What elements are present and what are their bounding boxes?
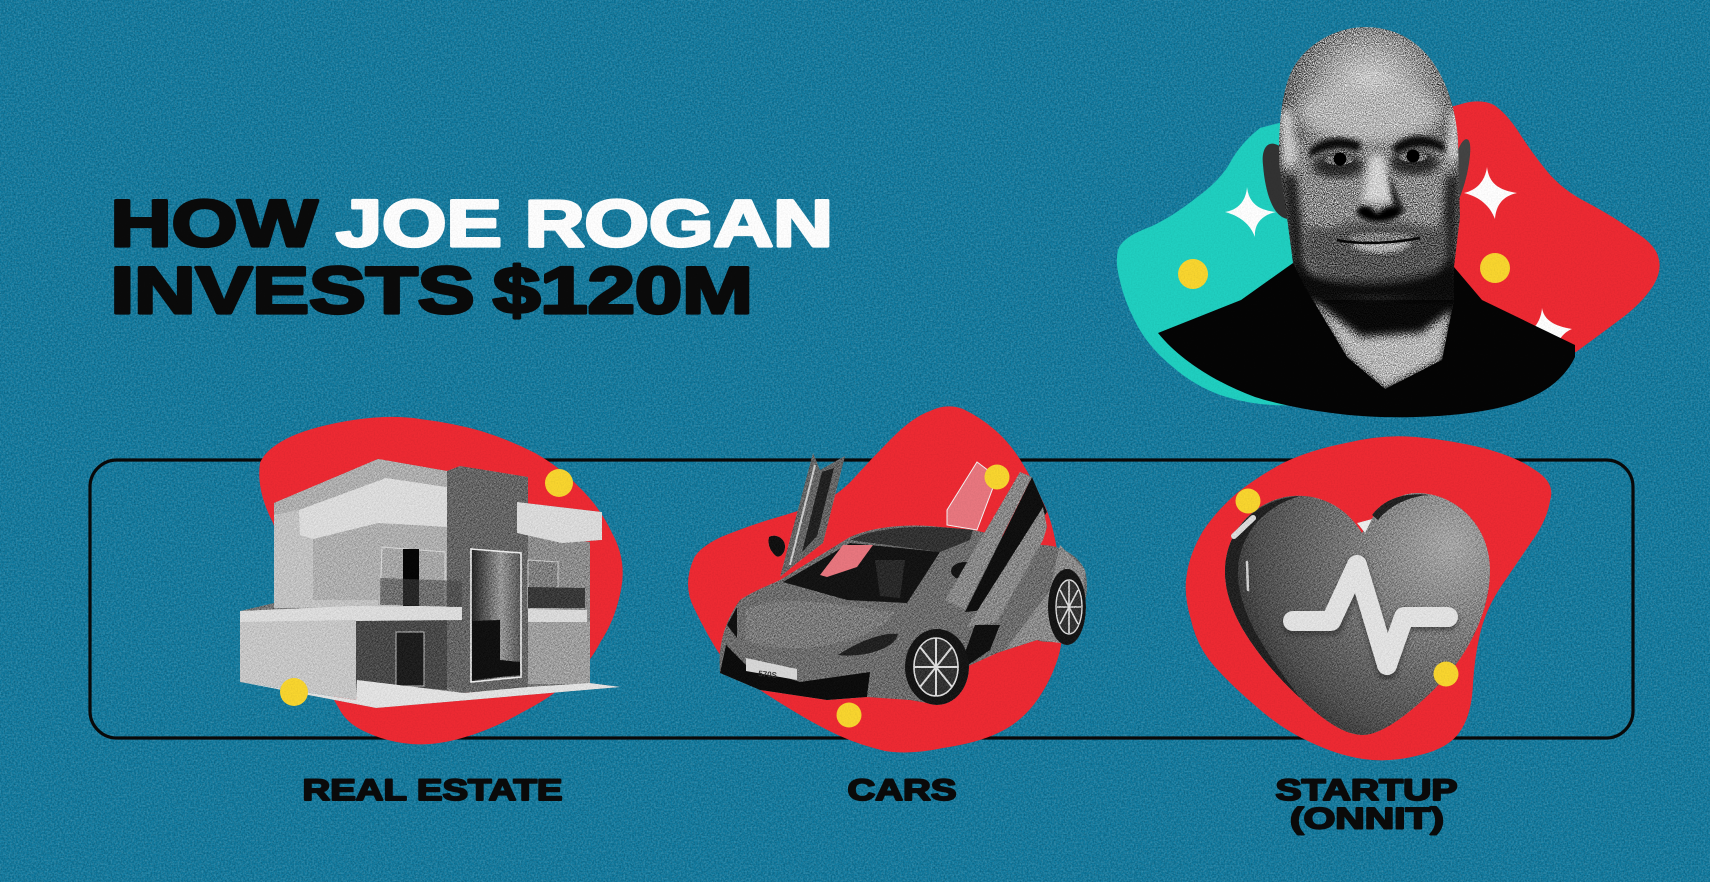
neck base xyxy=(1285,255,1462,389)
title: $120M xyxy=(493,253,753,327)
left jaw shadow xyxy=(1284,175,1310,295)
side mirror right xyxy=(951,562,979,580)
red blob xyxy=(688,406,1063,752)
windshield xyxy=(783,543,940,603)
yellow dot teal xyxy=(1178,259,1208,289)
left eye white xyxy=(1325,155,1353,165)
plate text: 570S xyxy=(758,669,778,680)
startup illustration xyxy=(1186,436,1551,760)
icon: sparkle on red xyxy=(1464,167,1517,219)
icon: sparkle on teal xyxy=(1225,187,1276,237)
rear spokes xyxy=(1057,581,1081,633)
balcony glass xyxy=(380,578,462,607)
cars illustration xyxy=(688,406,1087,752)
front tyre xyxy=(905,629,969,705)
right eyebrow xyxy=(1392,136,1445,155)
yellow dot top xyxy=(545,469,573,497)
upper right balcony xyxy=(528,587,585,608)
lower intake xyxy=(720,645,870,700)
black shirt xyxy=(1158,263,1575,417)
number plate xyxy=(746,658,797,680)
right pupil xyxy=(1406,150,1420,162)
yellow dot top xyxy=(984,464,1010,490)
main slab xyxy=(240,606,462,623)
right jaw shadow xyxy=(1438,175,1458,295)
teal blob xyxy=(1117,110,1400,405)
tall window lower dark xyxy=(472,620,520,680)
chin shadow xyxy=(1290,258,1458,300)
title: INVESTS xyxy=(110,253,474,327)
door glass reflection xyxy=(947,462,997,530)
rear tyre xyxy=(1048,569,1086,645)
raised left door xyxy=(780,453,845,577)
right door panel xyxy=(967,507,1047,627)
left eye socket xyxy=(1312,154,1364,178)
temple light left xyxy=(1279,110,1298,170)
label: startup onnit: STARTUP xyxy=(1276,774,1458,807)
right eye socket xyxy=(1389,151,1439,175)
right slab xyxy=(528,609,587,622)
nose side shadow xyxy=(1388,170,1406,212)
title: JOE ROGAN xyxy=(336,186,833,260)
rear fender xyxy=(1005,545,1085,650)
rim highlight xyxy=(1234,518,1253,536)
side fender xyxy=(867,650,915,697)
right canopy xyxy=(517,502,602,543)
reflected windshield patch xyxy=(820,545,873,577)
heart body xyxy=(1225,493,1490,735)
label: real estate: REAL ESTATE xyxy=(302,774,562,807)
large canopy xyxy=(299,478,486,539)
lower lip xyxy=(1350,240,1412,253)
right wall xyxy=(528,533,590,683)
upper wall xyxy=(274,459,447,608)
real estate illustration xyxy=(240,417,623,744)
skull and face xyxy=(1279,27,1460,262)
rounded investment panel frame xyxy=(90,460,1633,738)
plate shape xyxy=(746,658,797,680)
top roof xyxy=(274,459,447,515)
black door gap xyxy=(403,549,419,606)
left pupil xyxy=(1334,152,1346,166)
mirror xyxy=(768,536,785,557)
temple light right xyxy=(1446,110,1460,165)
forehead blend xyxy=(1298,84,1442,140)
left headlight xyxy=(727,607,737,638)
label: cars: CARS xyxy=(848,774,956,807)
lower block xyxy=(240,620,356,700)
left eyebrow xyxy=(1309,138,1362,158)
red blob xyxy=(259,417,623,744)
pulse line xyxy=(1293,565,1448,665)
ground plate xyxy=(240,680,621,708)
red blob xyxy=(1440,101,1660,352)
left door dark pane xyxy=(802,468,834,552)
portrait illustration xyxy=(1117,27,1660,417)
nose ridge xyxy=(1362,155,1394,203)
upper wall inner shade xyxy=(313,523,449,607)
house xyxy=(240,459,621,708)
right lower wall xyxy=(528,622,590,684)
hood highlight xyxy=(745,601,895,648)
neck light xyxy=(1311,296,1452,389)
right door frame xyxy=(945,472,1032,610)
nose underside xyxy=(1356,206,1402,222)
ear left xyxy=(1263,144,1288,219)
left door highlight xyxy=(790,465,815,565)
lower door xyxy=(396,632,424,686)
heart left rim xyxy=(1225,496,1300,698)
head and neck xyxy=(1279,27,1462,389)
heart top rim right xyxy=(1372,494,1430,520)
yellow dot red xyxy=(1480,253,1510,283)
front spokes xyxy=(914,638,958,696)
title: HOW xyxy=(110,186,318,260)
label: startup onnit xyxy=(1276,774,1458,836)
yellow dot bottom xyxy=(1434,662,1458,686)
lower face tone xyxy=(1283,140,1458,296)
title xyxy=(110,186,833,327)
door sill dark xyxy=(958,625,1000,672)
upper left window xyxy=(380,547,445,607)
tall window xyxy=(471,549,521,682)
sports car xyxy=(720,453,1087,705)
lower interior xyxy=(353,618,447,690)
inner highlight xyxy=(1247,562,1248,590)
upper right window xyxy=(528,560,558,608)
pulse shadow xyxy=(1293,566,1448,670)
yellow dot bottom xyxy=(280,678,308,706)
rear rim xyxy=(1056,580,1082,634)
ear right xyxy=(1458,139,1470,202)
mouth line xyxy=(1337,238,1420,243)
right eye white xyxy=(1399,152,1427,162)
yellow dot top xyxy=(1236,488,1260,514)
headlight xyxy=(838,634,898,656)
yellow dot bottom xyxy=(836,702,862,728)
roof xyxy=(850,527,973,552)
dark stone column xyxy=(447,466,528,693)
notch highlight xyxy=(1357,519,1372,533)
red blob xyxy=(1186,436,1551,760)
icon: heart xyxy=(1225,493,1490,735)
icon: partially hidden sparkle xyxy=(1525,308,1572,352)
stubble xyxy=(1304,220,1446,285)
right door dark xyxy=(965,477,1047,612)
house backing xyxy=(240,600,590,700)
car body xyxy=(720,525,1087,704)
label: startup onnit: (ONNIT) xyxy=(1290,802,1444,836)
front rim xyxy=(914,638,958,696)
cabin seat detail xyxy=(875,560,905,598)
upper lip xyxy=(1350,233,1412,241)
